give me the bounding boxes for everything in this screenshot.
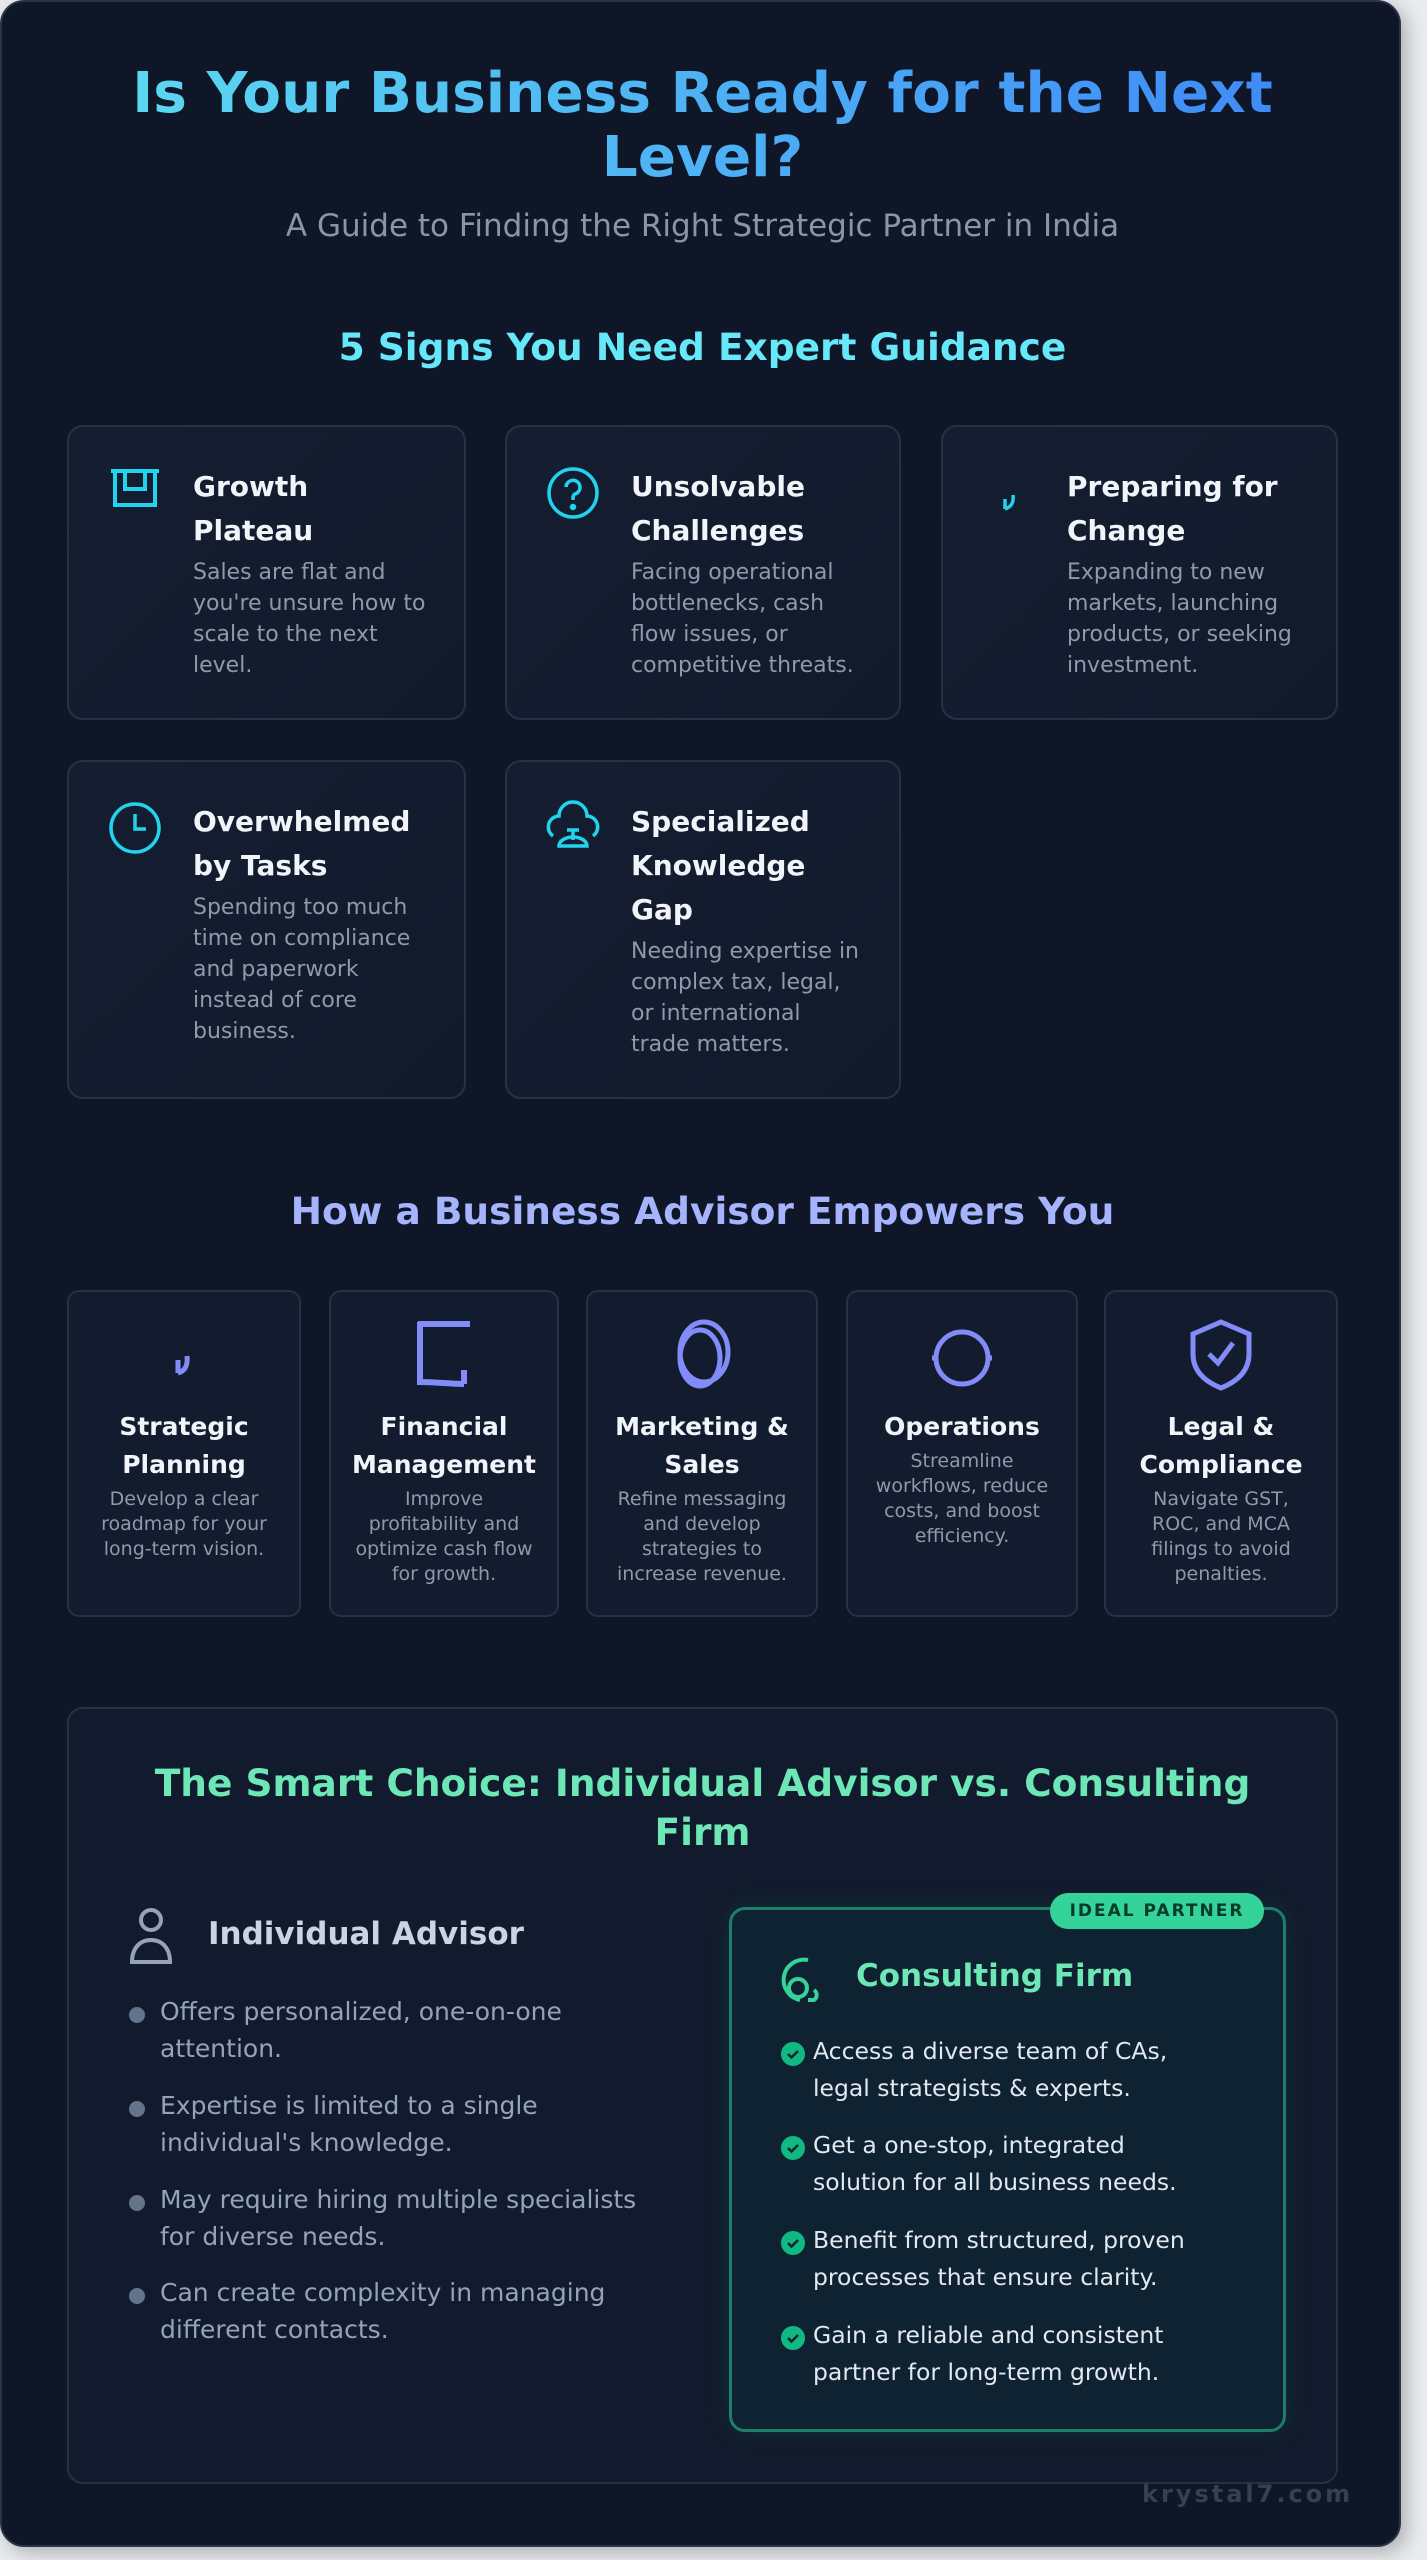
text: [101, 1412, 267, 1560]
list: firm: [781, 2037, 1185, 2386]
heading: comparison: The Smart Choice: Individual Advisor vs. Consulting: [155, 1761, 1250, 1805]
panel: consulting firm: [729, 1907, 1286, 2432]
text: Develop a clear roadmap for your long-term vision.: [101, 1488, 267, 1560]
text: [193, 805, 410, 1044]
list: individual: Expertise is limited to a single individual's knowledge.: [160, 2091, 538, 2157]
text: Streamline workflows, reduce costs, and boost efficiency.: [876, 1450, 1048, 1547]
text: Legal &: [1168, 1412, 1274, 1441]
text: Sales are flat and you're unsure how to scale to the next level.: [193, 560, 425, 678]
list: individual: May require hiring multiple specialists for diverse needs.: [160, 2185, 636, 2251]
text: Preparing for: [1067, 470, 1278, 503]
icon: [678, 1320, 730, 1388]
title: Consulting Firm: [856, 1958, 1133, 1994]
card: overwhelmed: [67, 760, 466, 1099]
heading: comparison: [154, 1761, 1250, 1854]
list: firm: Get a one-stop, integrated solution for all business needs.: [813, 2131, 1177, 2196]
text: [1139, 1412, 1303, 1585]
list: firm: Benefit from structured, proven processes that ensure clarity.: [813, 2226, 1185, 2291]
text: Gap: [631, 893, 693, 926]
text: Financial: [381, 1412, 507, 1441]
text: Overwhelmed: [193, 805, 410, 838]
icon: [417, 1321, 470, 1387]
text: [631, 805, 859, 1057]
icon: person: [130, 1908, 172, 1964]
card: knowledge gap: [505, 760, 901, 1099]
icon: [176, 1356, 190, 1376]
individual advisor heading: [130, 1908, 524, 1964]
text: Plateau: [193, 514, 313, 547]
text: Unsolvable: [631, 470, 805, 503]
panel: comparison: [67, 1707, 1338, 2484]
firm heading: [782, 1958, 1133, 2002]
title: Level?: [602, 125, 803, 190]
icon: cloud: [546, 800, 600, 848]
icon: question: [547, 467, 599, 519]
text: Spending too much time on compliance and paperwork instead of core business.: [193, 895, 410, 1044]
list: individual: [129, 1997, 636, 2344]
list: firm: Gain a reliable and consistent partner for long-term growth.: [813, 2321, 1163, 2386]
list: firm: Access a diverse team of CAs, legal strategists & experts.: [813, 2037, 1167, 2102]
text: Expanding to new markets, launching products, or seeking investment.: [1067, 560, 1292, 678]
icon: [932, 1330, 992, 1386]
text: Facing operational bottlenecks, cash flow issues, or competitive threats.: [631, 560, 854, 678]
heading: advisor: How a Business Advisor Empowers You: [291, 1189, 1114, 1233]
card: legal: [1104, 1290, 1338, 1617]
icon: [1190, 1319, 1252, 1391]
icon: basket: [111, 469, 159, 507]
title: Is Your Business Ready for the Next: [132, 61, 1273, 126]
text: Knowledge: [631, 849, 805, 882]
icon: hook: [1003, 494, 1015, 511]
card: marketing: [586, 1290, 818, 1617]
text: [1067, 470, 1292, 678]
heading: comparison: Firm: [654, 1810, 751, 1854]
text: [631, 470, 854, 678]
card: unsolvable challenges: [505, 425, 901, 720]
text: Navigate GST, ROC, and MCA filings to avoid penalties.: [1151, 1488, 1291, 1585]
text: Specialized: [631, 805, 810, 838]
title: [2, 62, 1403, 190]
text: [352, 1412, 536, 1585]
badge: ideal partner: [1050, 1893, 1264, 1929]
text: Refine messaging and develop strategies to increase revenue.: [617, 1488, 787, 1585]
text: Growth: [193, 470, 308, 503]
text: Challenges: [631, 514, 804, 547]
icon: clock: [109, 802, 161, 854]
text: by Tasks: [193, 849, 327, 882]
text: Management: [352, 1450, 536, 1479]
list: individual: Can create complexity in managing different contacts.: [160, 2278, 605, 2344]
heading: 5 signs: 5 Signs You Need Expert Guidance: [339, 325, 1066, 369]
subtitle: A Guide to Finding the Right Strategic Partner in India: [286, 208, 1119, 244]
card: preparing for change: [941, 425, 1338, 720]
text: [193, 470, 425, 678]
list: individual: Offers personalized, one-on-one attention.: [160, 1997, 562, 2063]
text: Strategic: [119, 1412, 249, 1441]
text: Compliance: [1139, 1450, 1303, 1479]
card: growth plateau: [67, 425, 466, 720]
text: Change: [1067, 514, 1185, 547]
card: operations: [846, 1290, 1078, 1617]
text: Operations: [884, 1412, 1040, 1441]
card: financial: [329, 1290, 559, 1617]
text: Improve profitability and optimize cash flow for growth.: [355, 1488, 533, 1585]
text: Sales: [664, 1450, 740, 1479]
title: Individual Advisor: [208, 1916, 524, 1952]
watermark: krystal7.com: [1142, 2480, 1353, 2508]
badge: ideal partner: IDEAL PARTNER: [1070, 1901, 1244, 1921]
text: [615, 1412, 789, 1585]
text: Planning: [122, 1450, 246, 1479]
text: Needing expertise in complex tax, legal, or international trade matters.: [631, 939, 859, 1057]
icon: team: [782, 1958, 819, 2002]
card: strategic planning: [67, 1290, 301, 1617]
text: Marketing &: [615, 1412, 789, 1441]
